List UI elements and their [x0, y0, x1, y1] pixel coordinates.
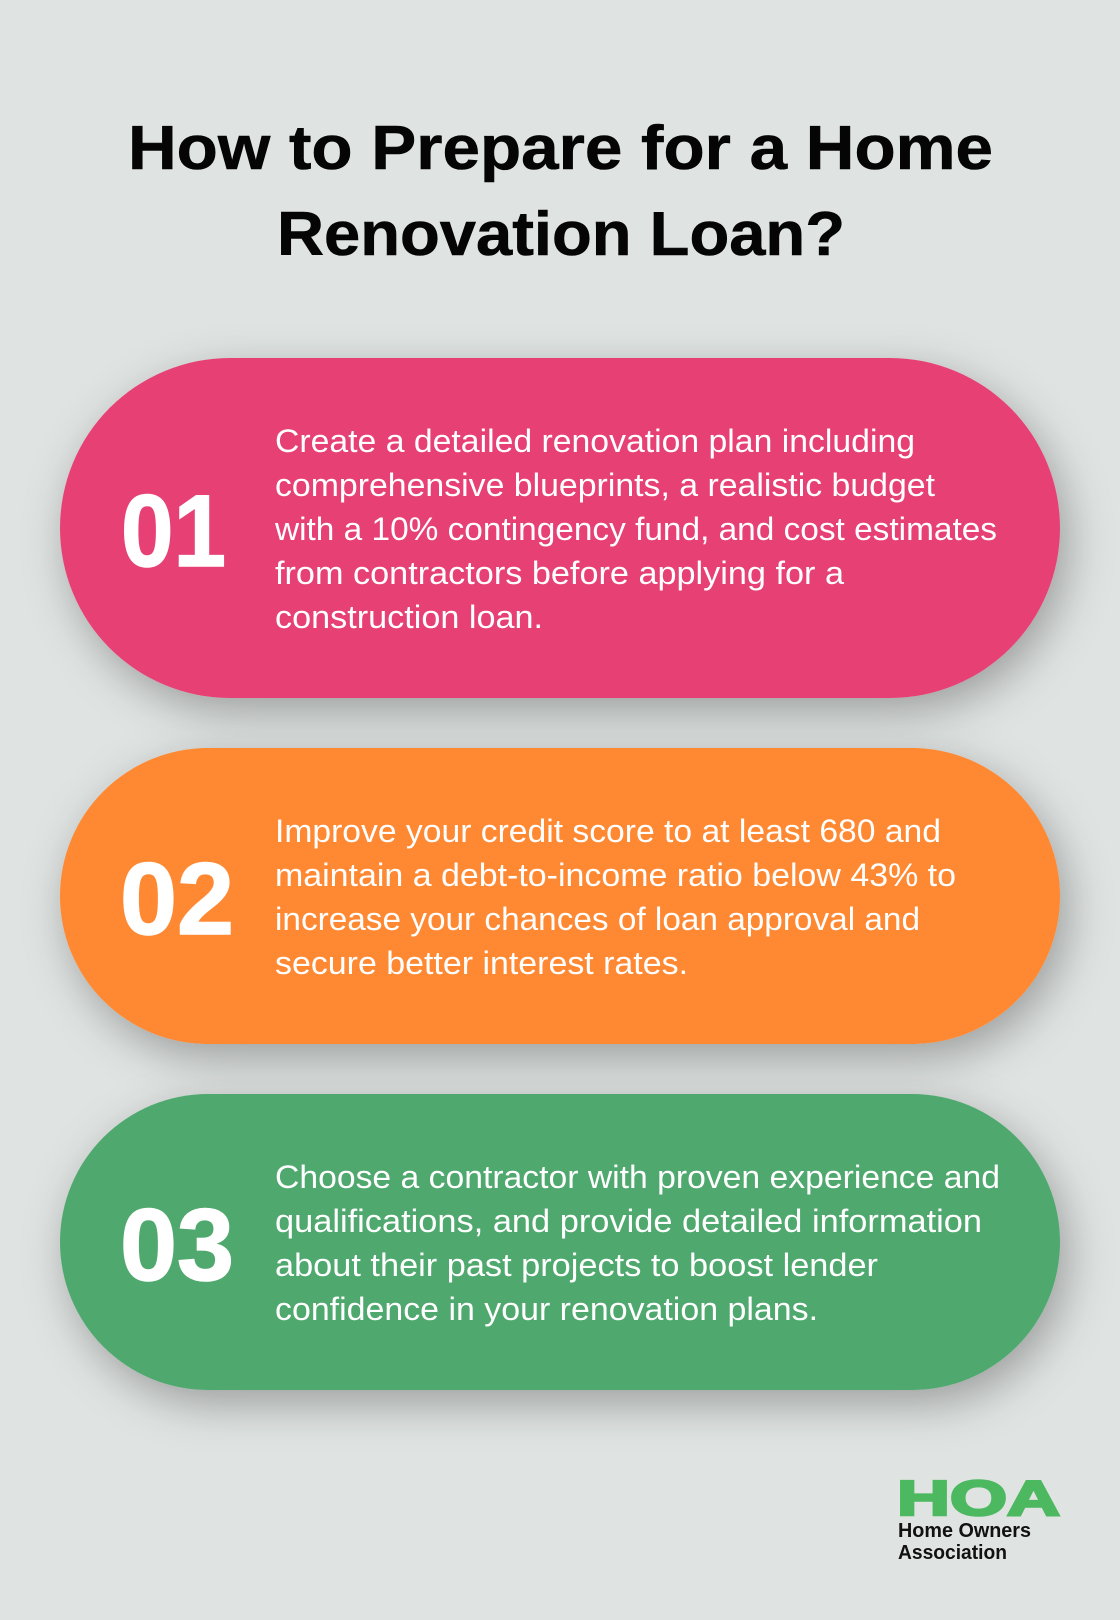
step 02 text: increase your chances of loan approval and [275, 901, 920, 937]
step 03 text: confidence in your renovation plans. [275, 1291, 818, 1327]
panel: step 02 [60, 748, 1060, 1044]
step 02 text: Improve your credit score to at least 680 and [275, 813, 941, 849]
logo: HOA Home Owners Association: HOA [897, 1472, 1060, 1526]
step 01 text: Create a detailed renovation plan including [275, 423, 915, 459]
step 02 text: secure better interest rates. [275, 945, 688, 981]
green pill background [60, 1094, 1060, 1390]
title: Renovation Loan? [277, 200, 845, 269]
step 03 text [275, 1159, 1000, 1327]
logo: HOA Home Owners Association: Home Owners [898, 1519, 1031, 1542]
number 01: 01 [121, 474, 226, 588]
number 03: 03 [120, 1188, 234, 1302]
step 03 text: Choose a contractor with proven experience and [275, 1159, 1000, 1195]
logo: HOA Home Owners Association [897, 1472, 1060, 1564]
logo: HOA Home Owners Association: Association [898, 1541, 1007, 1564]
step 02 text: maintain a debt-to-income ratio below 43% to [275, 857, 956, 893]
step 01 text: with a 10% contingency fund, and cost estimates [274, 511, 997, 547]
step 01 text: from contractors before applying for a [275, 555, 845, 591]
step 01 text: construction loan. [275, 599, 543, 635]
pink pill background [60, 358, 1060, 698]
step 03 text: qualifications, and provide detailed information [275, 1203, 982, 1239]
panel: step 03 [60, 1094, 1060, 1390]
title [128, 114, 993, 269]
orange pill background [60, 748, 1060, 1044]
step 03 text: about their past projects to boost lender [275, 1247, 878, 1283]
step 01 text [274, 423, 997, 635]
step 01 text: comprehensive blueprints, a realistic budget [275, 467, 935, 503]
number 02: 02 [120, 842, 234, 956]
title: How to Prepare for a Home [128, 114, 993, 183]
panel: step 01 [60, 358, 1060, 698]
step 02 text [275, 813, 956, 981]
